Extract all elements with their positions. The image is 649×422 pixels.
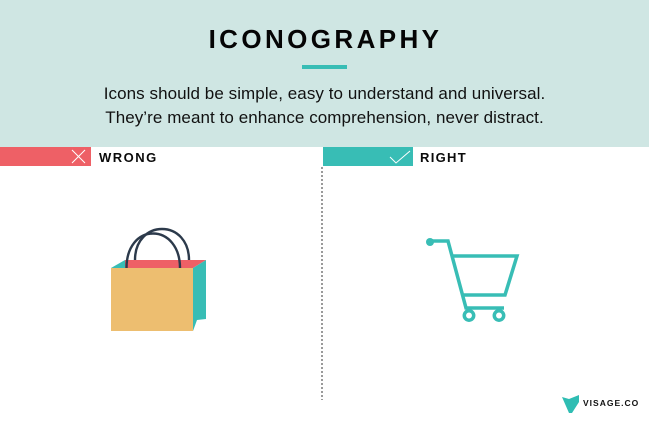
logo mark xyxy=(562,395,579,413)
icon: check xyxy=(390,150,410,164)
right ribbon xyxy=(323,147,413,166)
title: ICONOGRAPHY xyxy=(209,24,442,54)
wrong ribbon xyxy=(0,147,91,166)
right label: RIGHT xyxy=(420,150,467,165)
logo text: VISAGE.CO xyxy=(583,398,639,408)
logo: visage.co xyxy=(562,395,639,413)
header panel xyxy=(0,0,649,147)
intro text: They’re meant to enhance comprehension, never distract. xyxy=(105,108,544,127)
vertical dotted divider xyxy=(321,167,323,400)
intro text: Icons should be simple, easy to understand and universal. xyxy=(104,84,545,103)
intro text xyxy=(104,84,545,127)
wrong label: WRONG xyxy=(99,150,158,165)
icon: cross xyxy=(72,150,86,164)
title underline xyxy=(302,65,347,69)
